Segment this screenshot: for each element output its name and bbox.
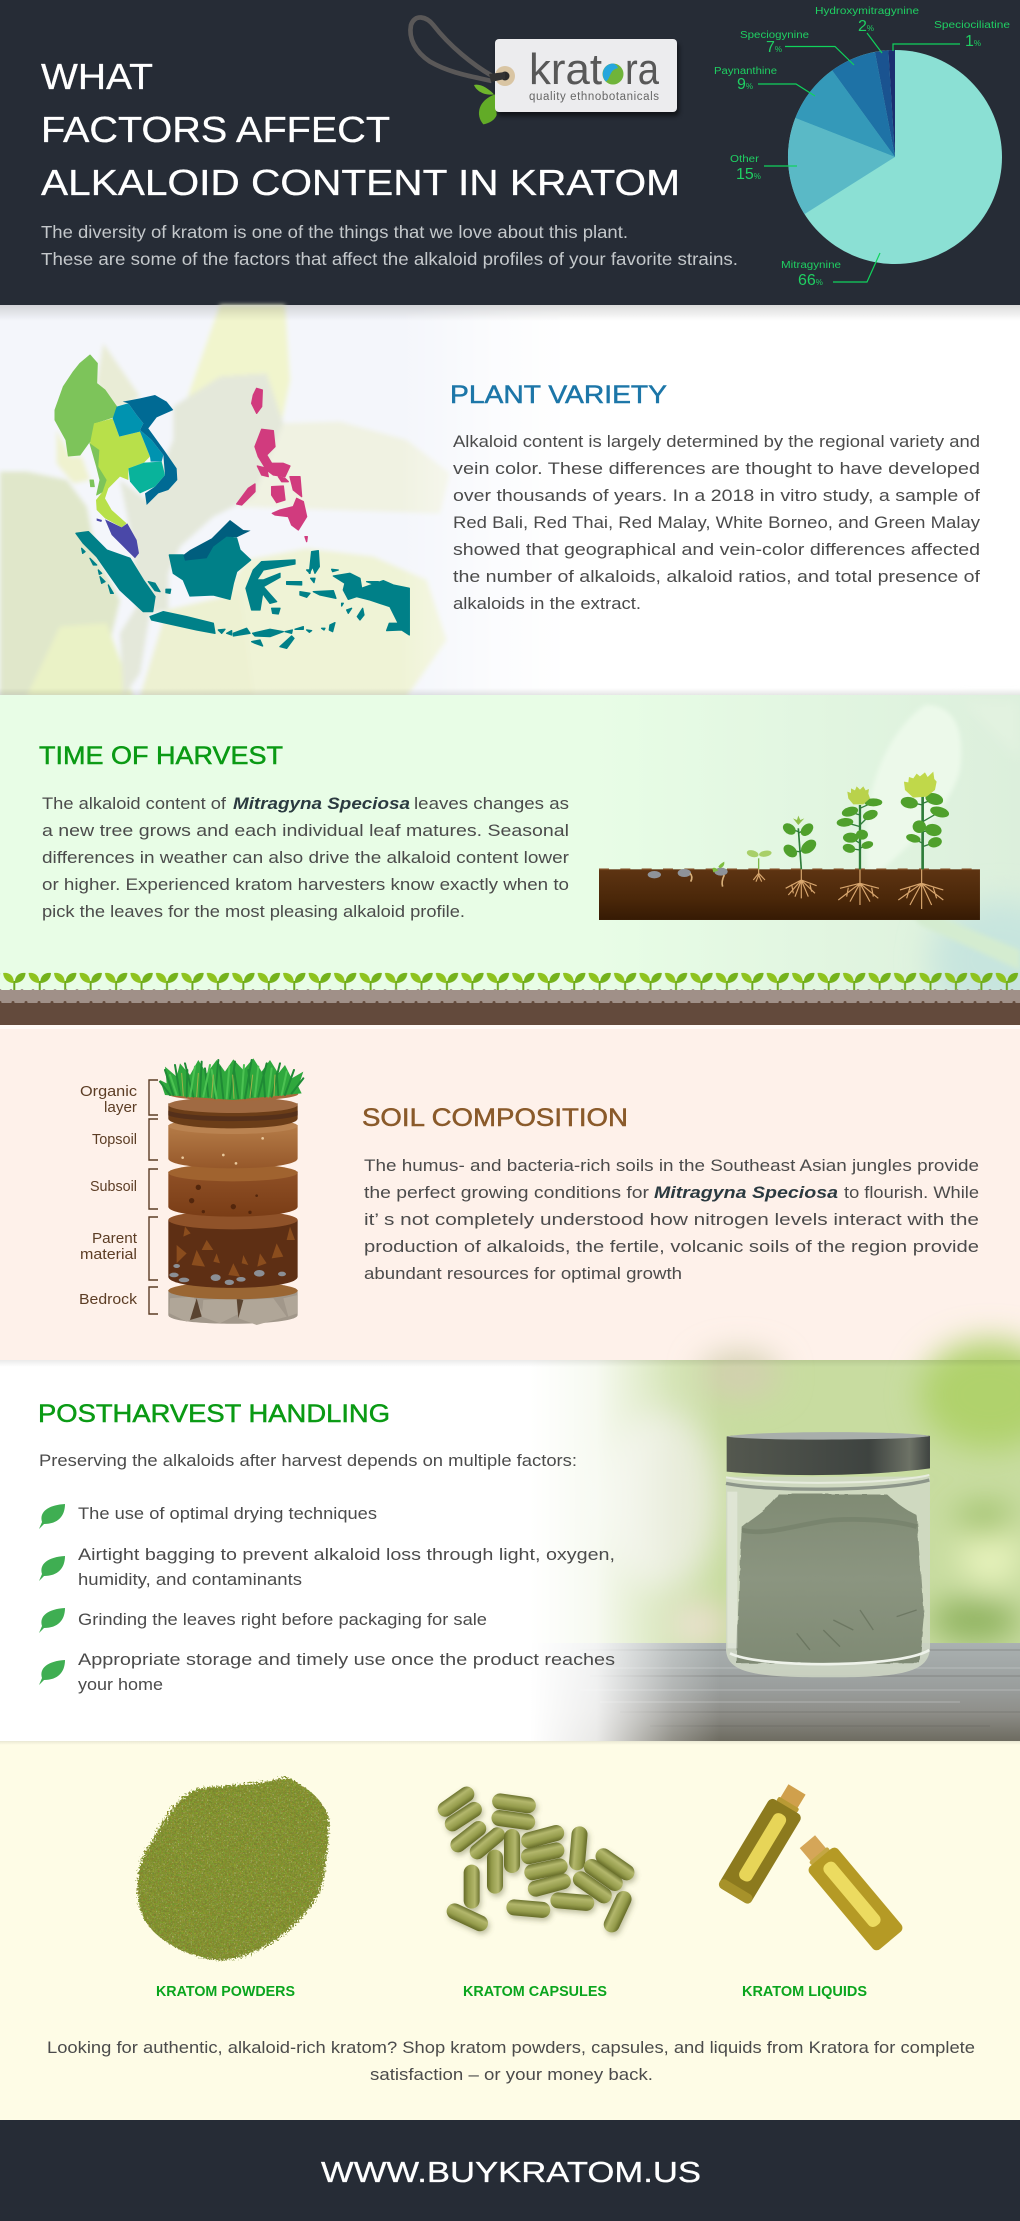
- logo tag: ra: [625, 45, 659, 94]
- panel: footer: [0, 2120, 1020, 2221]
- kratom powder image: [138, 1777, 329, 1960]
- bedrock layer: [168, 1282, 298, 1325]
- panel: time of harvest: [0, 695, 1020, 1025]
- panel: products: [0, 1741, 1020, 2120]
- bullet: grinding: Grinding the leaves right before packaging for sale: [78, 1610, 487, 1629]
- soil layer labels: Topsoil: [92, 1131, 137, 1148]
- label: kratom powders: KRATOM POWDERS: [156, 1984, 295, 2000]
- body text: time of harvest: differences in weather can also drive the alkaloid content lower: [42, 848, 569, 867]
- soil layer labels: Subsoil: [90, 1178, 137, 1195]
- pie label: mitragynine: [781, 260, 841, 289]
- bullet: drying: [39, 1504, 377, 1529]
- map: Indonesia: [76, 532, 409, 648]
- label: kratom capsules: KRATOM CAPSULES: [463, 1984, 607, 2000]
- body text: plant variety: Red Bali, Red Thai, Red Malay, White Borneo, and Green Malay: [453, 513, 981, 532]
- intro text: postharvest: Preserving the alkaloids after harvest depends on multiple factors:: [39, 1451, 577, 1470]
- panel: header: [0, 0, 1020, 305]
- grass: [160, 1058, 303, 1100]
- pie chart: [714, 6, 1011, 289]
- pie label: speciociliatine: 1%: [965, 33, 981, 50]
- intro text: These are some of the factors that affect the alkaloid profiles of your favorite strains.: [41, 249, 738, 269]
- body text: plant variety: [453, 432, 981, 613]
- parent material layer: [168, 1211, 298, 1288]
- jar photo: [530, 1340, 1020, 1741]
- intro text: [41, 222, 738, 269]
- bullet: bagging: [39, 1545, 615, 1589]
- body text: soil composition: [364, 1156, 979, 1283]
- body text: time of harvest: pick the leaves for the most pleasing alkaloid profile.: [42, 902, 465, 921]
- body text: time of harvest: [42, 794, 569, 921]
- organic layer: [168, 1087, 298, 1128]
- label: kratom liquids: KRATOM LIQUIDS: [742, 1984, 867, 2000]
- map: Sabah and Sarawak: [183, 520, 251, 561]
- soil layer labels: Organic: [80, 1083, 138, 1100]
- heading: time of harvest: TIME OF HARVEST: [39, 742, 283, 770]
- pie label: other: 15%: [736, 166, 761, 183]
- closing text: Looking for authentic, alkaloid-rich kratom? Shop kratom powders, capsules, and liquids from Kratora for complete: [47, 2038, 975, 2057]
- body text: time of harvest: Mitragyna Speciosa: [233, 794, 410, 813]
- pie label: speciogynine: [740, 30, 810, 56]
- bullet: bagging: Airtight bagging to prevent alkaloid loss through light, oxygen,: [78, 1545, 615, 1564]
- panel: postharvest handling: [0, 1340, 1020, 1741]
- soil column illustration: [160, 1058, 303, 1325]
- bullet: drying: The use of optimal drying techniques: [78, 1504, 377, 1523]
- pie label: hydroxymitragynine: [815, 6, 920, 35]
- pie label: paynanthine: [714, 66, 777, 93]
- body text: time of harvest: The alkaloid content of: [42, 794, 226, 813]
- heading: soil composition: SOIL COMPOSITION: [362, 1104, 628, 1132]
- title: ALKALOID CONTENT IN KRATOM: [41, 162, 680, 203]
- pie label: other: [730, 154, 761, 183]
- soil layer brackets: [149, 1080, 158, 1314]
- body text: plant variety: the number of alkaloids, alkaloid ratios, and total presence of: [453, 567, 980, 586]
- soil layer labels: layer: [104, 1099, 137, 1116]
- soil layer labels: Parent: [92, 1230, 138, 1247]
- heading: plant variety: PLANT VARIETY: [450, 381, 667, 409]
- title: [41, 56, 680, 203]
- pie label: hydroxymitragynine: 2%: [858, 18, 874, 35]
- kratom capsules image: [435, 1784, 638, 1935]
- body text: soil composition: Mitragyna Speciosa: [654, 1183, 838, 1202]
- closing text: satisfaction – or your money back.: [370, 2065, 653, 2084]
- body text: time of harvest: a new tree grows and each individual leaf matures. Seasonal: [42, 821, 569, 840]
- body text: soil composition: The humus- and bacteria-rich soils in the Southeast Asian jungles provide: [364, 1156, 979, 1175]
- sprout border: [0, 972, 1020, 1025]
- map: Myanmar: [55, 355, 117, 495]
- panel: soil composition: [0, 1025, 1020, 1360]
- body text: soil composition: production of alkaloids, the fertile, volcanic soils of the region provide: [364, 1237, 979, 1256]
- harvest background leaf: [700, 700, 1020, 1020]
- body text: soil composition: it’ s not completely understood how nitrogen levels interact with the: [364, 1210, 979, 1229]
- soil layer labels: Bedrock: [79, 1291, 138, 1308]
- bullet: storage: [39, 1650, 615, 1694]
- body text: plant variety: over thousands of years. In a 2018 in vitro study, a sample of: [453, 486, 980, 505]
- pie label: mitragynine: Mitragynine: [781, 260, 841, 271]
- kratom liquids image: [717, 1780, 905, 1952]
- jar: [726, 1432, 930, 1677]
- body text: soil composition: to flourish. While: [844, 1183, 979, 1202]
- footer URL: WWW.BUYKRATOM.US: [321, 2157, 701, 2189]
- intro text: The diversity of kratom is one of the things that we love about this plant.: [41, 222, 628, 242]
- pie label: mitragynine: 66%: [798, 272, 823, 289]
- plant growth illustration: [599, 772, 980, 920]
- map: Cambodia: [128, 462, 165, 493]
- pie label: paynanthine: 9%: [737, 76, 753, 93]
- logo tag: [410, 17, 679, 124]
- body text: plant variety: Alkaloid content is largely determined by the regional variety and: [453, 432, 980, 451]
- title: WHAT: [41, 56, 153, 97]
- pie label: speciogynine: 7%: [766, 39, 782, 56]
- soil layer labels: [79, 1083, 138, 1308]
- leaf background: [0, 305, 570, 697]
- soil layer labels: material: [80, 1246, 137, 1263]
- bullet: bagging: humidity, and contaminants: [78, 1570, 302, 1589]
- body text: time of harvest: leaves changes as: [414, 794, 569, 813]
- body text: plant variety: alkaloids in the extract.: [453, 594, 641, 613]
- pie label: paynanthine: Paynanthine: [714, 66, 777, 77]
- map: Laos: [113, 403, 163, 462]
- pie label: speciociliatine: Speciociliatine: [934, 20, 1011, 31]
- bullet: storage: Appropriate storage and timely use once the product reaches: [78, 1650, 615, 1669]
- map: Thailand: [90, 418, 150, 527]
- logo tag: quality ethnobotanicals: [529, 91, 659, 103]
- heading: postharvest handling: POSTHARVEST HANDLING: [38, 1400, 390, 1428]
- pie label: other: Other: [730, 154, 760, 165]
- topsoil layer: [168, 1118, 298, 1168]
- logo tag: krat: [529, 45, 602, 94]
- bullet: grinding: [39, 1608, 487, 1633]
- title: FACTORS AFFECT: [41, 109, 390, 150]
- pie label: hydroxymitragynine: Hydroxymitragynine: [815, 6, 920, 17]
- pie label: speciogynine: Speciogynine: [740, 30, 810, 41]
- map of Southeast Asia: [55, 355, 409, 648]
- bullet: storage: your home: [78, 1675, 163, 1694]
- closing text: [47, 2038, 975, 2084]
- body text: plant variety: showed that geographical and vein-color differences affected: [453, 540, 980, 559]
- body text: soil composition: abundant resources for optimal growth: [364, 1264, 682, 1283]
- body text: plant variety: vein color. These differences are thought to have developed: [453, 459, 980, 478]
- body text: soil composition: the perfect growing conditions for: [364, 1183, 649, 1202]
- pie label: speciociliatine: [934, 20, 1011, 50]
- body text: time of harvest: or higher. Experienced kratom harvesters know exactly when to: [42, 875, 569, 894]
- panel: plant variety: [0, 305, 1020, 697]
- map: Vietnam: [123, 395, 177, 505]
- subsoil layer: [168, 1164, 298, 1217]
- map: Malaysia peninsula: [97, 518, 139, 558]
- map: Philippines: [237, 388, 307, 542]
